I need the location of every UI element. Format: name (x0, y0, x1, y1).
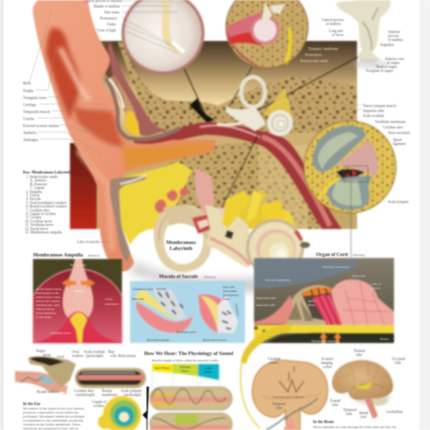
panel: organ of corti: Vestibular membrane (322, 265, 350, 269)
unrolled cochlea diagram: (perilymph) (124, 393, 142, 397)
top labels: Promontory (100, 16, 117, 20)
whole brain lateral view: Temporal (343, 408, 357, 412)
brain cross-section: cortex (269, 361, 278, 365)
key: membranous labyrinth: 4. Saccule (26, 197, 41, 201)
panel: macula of saccule: Hair cells (223, 285, 236, 289)
background behind the auricle (70, 143, 130, 229)
unrolled cochlea diagram: Basilar (102, 389, 113, 393)
brain cross-section: Transverse gyrus of Heschl (273, 396, 304, 399)
whole brain lateral view: cortex (323, 365, 332, 369)
panel: macula of saccule: force (223, 297, 230, 301)
heading: how we hear (144, 351, 233, 362)
text block: in the brain: Nerve impulses are sent through the brain stem and into the (313, 425, 397, 429)
panel: macula of saccule: Gelatinous layer (133, 287, 153, 291)
right labels: Vestibular membrane (375, 120, 406, 124)
key: membranous labyrinth: 12. Facial nerve (25, 227, 48, 231)
panel: membranous ampulla: Crista (105, 297, 113, 301)
whole brain lateral view (321, 349, 405, 419)
heading: Macula of Saccule: Macula of Saccule (159, 275, 199, 280)
panel: organ of corti: Basilar (380, 337, 390, 341)
top labels: Cone of light (97, 28, 116, 32)
unrolled cochlea diagram: Oval (72, 350, 79, 354)
ossicles top right (336, 0, 391, 68)
labels on the ossicles: Anterior (388, 30, 401, 34)
unrolled cochlea diagram (15, 349, 146, 397)
panel: membranous ampulla: As the head rotates, (36, 287, 62, 292)
text block: in the ear: Movement of the stapes in the oval window (23, 406, 85, 410)
thick nerve part (241, 323, 290, 364)
heading: Organ of Corti: (Hearing) (353, 253, 365, 257)
brain cross-section (252, 357, 328, 430)
right labels: Spiral (393, 138, 402, 142)
unrolled cochlea diagram: (perilymph) (86, 354, 104, 358)
bracket and arrow between cochlea and waves (143, 387, 149, 430)
unrolled cochlea diagram: Scala tympani (121, 389, 141, 393)
yellow cochlear nerve arc (241, 326, 286, 428)
panel: organ of corti: Stereocilia (352, 274, 366, 278)
panel: organ of corti: support (371, 286, 381, 290)
panel: macula of saccule: Hair cells (132, 297, 145, 301)
labels on the ossicles: of stapes (387, 61, 400, 65)
text block: in the ear: In the Ear (23, 401, 41, 406)
whole brain lateral view: imaging (321, 361, 333, 365)
labels on the ossicles: Long arm (329, 29, 343, 33)
middle ear ossicles and cochlea (217, 77, 293, 136)
labels on the ossicles: of incus (332, 33, 344, 37)
labels on dark bone: Tympanic membrane (308, 47, 339, 51)
labels on dark bone: Promontory (305, 53, 322, 57)
temporal bone (97, 41, 357, 229)
labels on the ossicles: Head of stapes (376, 65, 398, 69)
wave tube: medium frequency (150, 413, 232, 430)
left anatomical labels: Antitragus (23, 138, 39, 142)
whole brain lateral view: lobe (346, 412, 353, 416)
heading: how we hear: How We Hear: The Physiology of Sound (144, 351, 233, 357)
key: membranous labyrinth: B. Posterior (30, 182, 48, 186)
text block: in the ear: produces compressive waves within the (23, 410, 79, 414)
key: membranous labyrinth: 5. Oval (vestibular) window (26, 201, 67, 205)
text block: in the ear (23, 401, 85, 430)
panel: organ of corti: Cells of (371, 282, 382, 286)
heading: Membranous Ampulla: Membranous Ampulla (33, 252, 83, 258)
frequency bars (152, 364, 219, 388)
panel: macula of saccule: gravitational (223, 293, 239, 297)
whole brain lateral view: Occipital (392, 357, 405, 361)
panel: membranous ampulla: This produces (36, 307, 55, 311)
unrolled cochlea diagram: Oval (57, 355, 64, 359)
unrolled cochlea diagram: cells (110, 354, 117, 358)
brain cross-section: Temporal (272, 402, 286, 406)
frequency bars: Fibers (181, 369, 190, 373)
text block: in the brain (313, 419, 397, 429)
right labels: ligament (393, 142, 406, 146)
circle: middle ear detail (226, 0, 308, 68)
right labels: Stria vascularis (388, 131, 411, 135)
left anatomical labels: Helix (23, 82, 31, 86)
text block: in the brain: In the Brain (313, 419, 335, 424)
cochlea snail icon (98, 396, 141, 430)
labels on the ossicles: Stapedius (380, 43, 395, 47)
unrolled cochlea diagram: Incus (43, 353, 51, 357)
unrolled cochlea diagram: Helicotrema (118, 354, 136, 358)
panel: membranous ampulla (33, 259, 122, 343)
label: lobe of auricle (77, 240, 110, 244)
unrolled cochlea diagram: Stapes (36, 349, 46, 353)
label: cupula of cochlea: Cupula of (92, 400, 107, 404)
panel: membranous ampulla: semicircular canal (36, 295, 60, 299)
label: cupula of cochlea (92, 400, 107, 408)
panel: organ of corti (254, 258, 394, 343)
right labels: Scala vestibuli (363, 114, 384, 118)
key: membranous labyrinth: 3. Utricle (26, 194, 40, 198)
whole brain lateral view: lobe (332, 403, 339, 407)
left anatomical labels: Triangular fossa (23, 96, 47, 100)
left anatomical labels: Temporalis muscle (23, 110, 51, 114)
whole brain lateral view: Acoustic (321, 357, 334, 361)
labels on the ossicles: Lateral process (322, 18, 344, 22)
top labels: Handle of malleus (94, 4, 121, 8)
unrolled cochlea diagram: membrane (102, 393, 118, 397)
heading: how we hear: Relative lengths of fibers within the sensorial cochlea (152, 358, 219, 362)
panel: organ of corti: fibers (308, 303, 316, 307)
panel: membranous ampulla: moves the cupula, (36, 299, 60, 304)
right labels: Tensor tympani muscle (363, 104, 397, 108)
unrolled cochlea diagram: Scala vestibuli (84, 350, 105, 354)
left anatomical labels: Antihelix (23, 131, 37, 135)
frequency bars: Fibers (204, 370, 213, 374)
heading: Organ of Corti: Organ of Corti (316, 253, 349, 258)
heading: Macula of Saccule (159, 275, 216, 280)
frequency bars: Medium (180, 365, 191, 369)
yellow nerve bundle and shell (195, 168, 296, 229)
labels on the ossicles: process (388, 34, 399, 38)
whole brain lateral view: Frontal (330, 399, 340, 403)
whole brain lateral view: Cerebellum (386, 410, 403, 414)
label: lobe of auricle: Lobe of auricle (77, 240, 99, 244)
circle: cochlea section (304, 121, 396, 258)
membranous labyrinth (154, 190, 310, 277)
label: Membranous Labyrinth: Membranous (166, 240, 196, 246)
key: membranous labyrinth: 11. Vestibular nerve (25, 223, 54, 227)
panel: macula of saccule: Head held upright (147, 338, 169, 342)
panel: macula of saccule: Otoliths (156, 287, 167, 291)
labels on the ossicles: Anterior crus (385, 57, 405, 61)
label: Membranous Labyrinth: Labyrinth (170, 246, 192, 252)
panel: membranous ampulla: ampullaris (105, 302, 119, 306)
black zoom connector lines (182, 57, 358, 207)
left anatomical labels (23, 10, 125, 170)
heading: Membranous Ampulla: (Balance) (88, 254, 100, 258)
right labels: Stapedius tube (363, 109, 384, 113)
brain cross-section: lobe (276, 406, 283, 410)
unrolled cochlea diagram: window (72, 354, 84, 358)
panel: macula of saccule: Head bent forward (203, 338, 227, 342)
unrolled cochlea diagram: (endolymph) (76, 393, 95, 397)
circle: tympanic membrane (122, 0, 203, 73)
key: membranous labyrinth: 1. Semicircular canals (26, 175, 58, 179)
top labels: Umbo (107, 22, 116, 26)
panel: membranous ampulla: endolymph in the (36, 291, 60, 295)
panel: membranous ampulla: Endolymph (70, 263, 86, 267)
right labels (340, 104, 411, 204)
panel: main cross-section of the ear (33, 0, 358, 272)
heading: Macula of Saccule: (Balance) (204, 275, 216, 279)
whole brain lateral view: Parietal (354, 349, 365, 353)
key: membranous labyrinth: Key: Membranous Labyrinth (23, 170, 72, 174)
whole brain lateral view: lobe (395, 361, 402, 365)
panel: membranous ampulla: Vestibular nerve (50, 331, 71, 335)
top labels: Pars tensa (105, 10, 119, 14)
unrolled cochlea diagram: Round window (37, 390, 59, 394)
panel: macula of saccule (130, 281, 245, 343)
unrolled cochlea diagram: Hair (108, 350, 115, 354)
label: Membranous Labyrinth (166, 240, 196, 252)
panel: membranous ampulla: bending hair cells. (36, 303, 60, 307)
key: membranous labyrinth: 10. Cochlear nerve (25, 219, 53, 223)
auricle (33, 0, 215, 272)
panel: organ of corti: Tectorial membrane (265, 278, 291, 282)
panel: membranous ampulla: nerve impulses (36, 311, 57, 315)
left anatomical labels: External acoustic meatus (23, 124, 60, 128)
key: membranous labyrinth: 6. Round (cochlear) window (26, 205, 68, 209)
frequency bars: Short Fibers (154, 366, 170, 370)
left anatomical labels: Concha (23, 117, 34, 121)
right labels: Cochlear duct (383, 126, 403, 130)
key: membranous labyrinth: 9. Cochlea (26, 216, 42, 220)
whole brain lateral view: Spinal (359, 411, 368, 415)
panel: macula of saccule: Vestibular nerve (176, 330, 197, 334)
key: membranous labyrinth: 7. Cochlear duct (26, 208, 50, 212)
frequency bars: Long (205, 366, 212, 370)
key: membranous labyrinth (23, 170, 72, 234)
panel: organ of corti: Vibration of basilar (311, 339, 337, 343)
top labels (84, 0, 123, 32)
canal wall with cartilage and muscle (106, 42, 180, 139)
panel: macula of saccule: bend under (223, 289, 237, 293)
left anatomical labels: Scapha (23, 89, 34, 93)
key: membranous labyrinth: A. Anterior (30, 179, 47, 183)
canal mucosa and tube (132, 122, 342, 229)
label: cupula of cochlea: cochlea (93, 404, 104, 408)
text block: in the ear: is transmitted to the endolymph, producing (23, 418, 84, 424)
panel: organ of corti: Nerve (308, 299, 316, 303)
brain cross-section: Cerebral (268, 357, 280, 361)
text block: in the ear: vibration in the basilar membrane. These (23, 422, 81, 426)
right labels: Scala tympani (388, 200, 408, 204)
panel: organ of corti: Outer hair cells (256, 296, 276, 300)
key: membranous labyrinth: 8. Cupula of cochlea (26, 212, 56, 216)
unrolled cochlea diagram: Cochlear duct (74, 389, 94, 393)
text block: in the ear: perilymph. Movement within the perilymph (23, 414, 85, 418)
labels on dark bone: Semicircular canals (300, 59, 329, 63)
labels on dark bone (300, 47, 339, 63)
labels on the ossicles (322, 18, 405, 73)
panel: organ of corti: Inner hair cells (256, 303, 276, 307)
fatty tissue and lower shell (110, 162, 192, 262)
heading: Organ of Corti (316, 253, 365, 258)
whole brain lateral view: lobe (356, 353, 363, 357)
wave tube: high frequency (150, 387, 232, 410)
labels on the ossicles: of malleus (326, 22, 342, 26)
left anatomical labels: Cartilage (23, 103, 37, 107)
panel: membranous ampulla: Cupula (74, 289, 84, 293)
labels on the ossicles: of malleus (388, 38, 404, 42)
key: membranous labyrinth: 13. Membranous ampulla (25, 230, 62, 234)
labels on the ossicles: Footplate of stapes (366, 69, 394, 73)
key: membranous labyrinth: C. Lateral (30, 186, 44, 190)
panel: membranous ampulla: to the brain. (36, 315, 52, 319)
key: membranous labyrinth: 2. Ampulla (26, 190, 42, 194)
whole brain lateral view: cord (360, 415, 367, 419)
soft shadow beneath labyrinth (130, 262, 320, 292)
